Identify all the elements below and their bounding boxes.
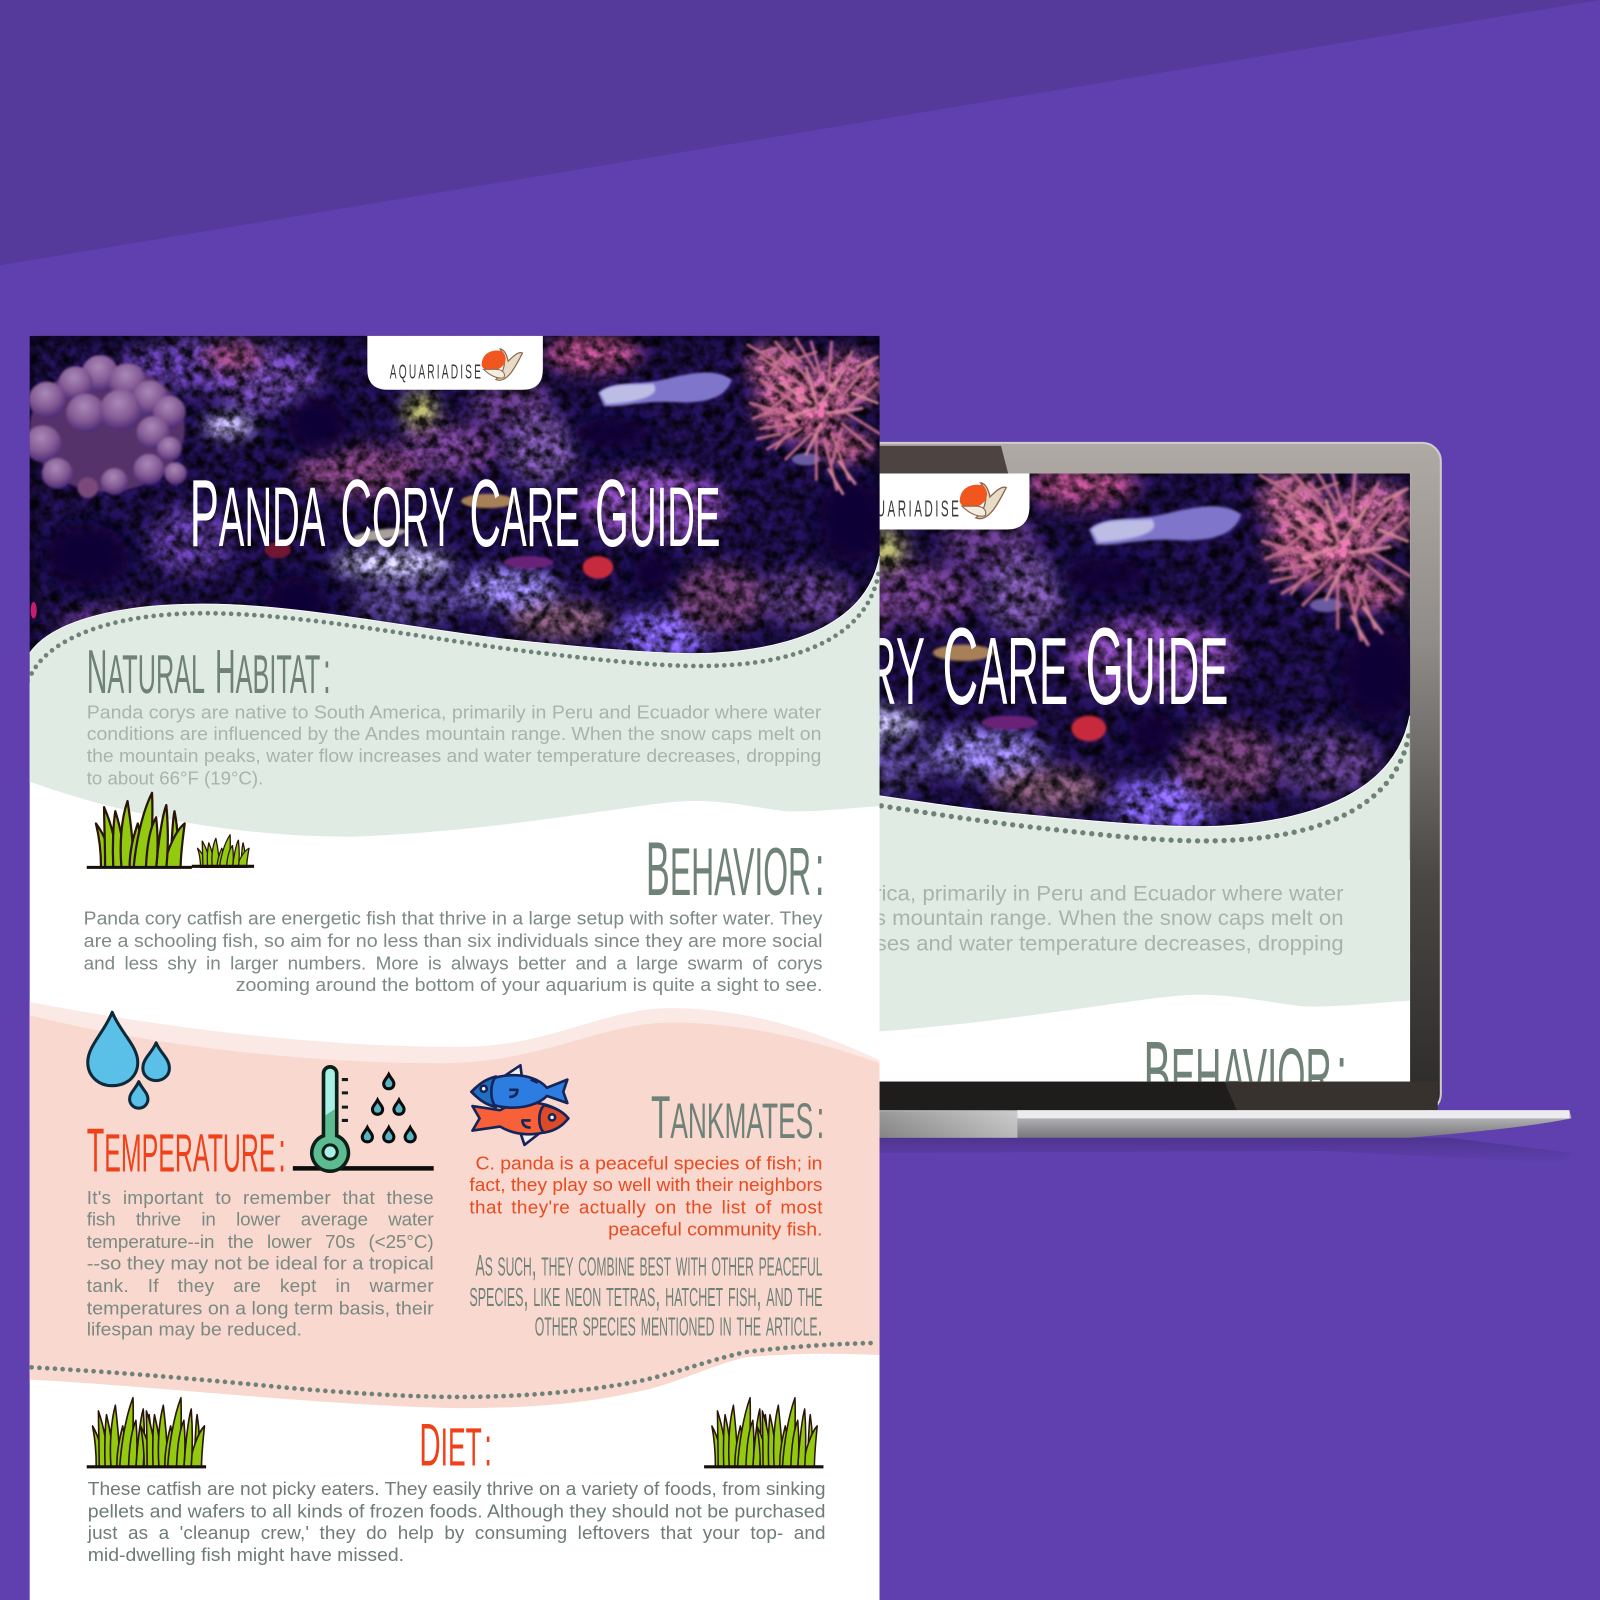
screen body text: Panda corys are native to South America, primarily in Peru and Ecuador where water xyxy=(506,882,1344,906)
text: tankmates red: C. panda is a peaceful species of fish; in xyxy=(476,1152,822,1173)
panel: pink wave xyxy=(30,1015,880,1408)
infographic card: species, like neon tetras, hatchet fish, and the xyxy=(469,1273,822,1314)
text: temperature: --so they may not be ideal for a tropical xyxy=(87,1252,434,1273)
text: temperature: fish thrive in lower average water xyxy=(87,1209,434,1230)
laptop base xyxy=(816,1110,1571,1138)
screen photo xyxy=(880,474,1410,860)
text: diet: pellets and wafers to all kinds of frozen foods. Although they should not be purchased xyxy=(88,1500,826,1521)
screen logo xyxy=(880,474,1030,530)
text: behavior: Panda cory catfish are energetic fish that thrive in a large setup with softer water. They xyxy=(84,907,823,928)
screen logo: AQUARIADISE xyxy=(855,495,961,522)
text: tankmates red: peaceful community fish. xyxy=(608,1219,822,1240)
infographic card: other species mentioned in the article. xyxy=(535,1303,822,1344)
icon: water drops xyxy=(88,1012,169,1108)
header photo xyxy=(24,336,887,683)
text: behavior: are a schooling fish, so aim for no less than six individuals since they are more social xyxy=(84,930,822,951)
laptop mockup xyxy=(880,442,1572,1156)
laptop lid xyxy=(806,443,1441,1112)
heading: temperature: Temperature: xyxy=(87,1103,286,1188)
icon: grass left xyxy=(87,1398,206,1467)
heading: diet: Diet: xyxy=(419,1397,492,1482)
screen title: Panda Cory Care Guide xyxy=(624,581,1228,734)
text: diet xyxy=(87,1478,826,1565)
text: natural habitat: to about 66°F (19°C). xyxy=(87,768,263,789)
text: diet: just as a 'cleanup crew,' they do help by consuming leftovers that your top- and xyxy=(87,1522,826,1543)
screen body text xyxy=(880,885,1344,955)
text: temperature: lifespan may be reduced. xyxy=(87,1319,302,1340)
text: tankmates note xyxy=(470,1255,822,1336)
text: natural habitat: the mountain peaks, water flow increases and water temperature decreases, dropping xyxy=(87,745,821,766)
text: tankmates red xyxy=(469,1152,823,1240)
text: diet: mid-dwelling fish might have missed. xyxy=(88,1544,404,1565)
icon: grass behavior xyxy=(87,793,254,867)
natural habitat wave panel xyxy=(30,556,880,837)
text: behavior: zooming around the bottom of your aquarium is quite a sight to see. xyxy=(236,974,822,995)
icon: thermometer xyxy=(293,1067,434,1171)
text: natural habitat xyxy=(87,701,821,789)
icon: grass right xyxy=(704,1398,823,1467)
logo tab: AQUARIADISE xyxy=(390,361,483,384)
text: natural habitat: Panda corys are native to South America, primarily in Peru and Ecuador where water xyxy=(87,701,821,722)
heading: behavior: Behavior: xyxy=(646,807,824,916)
heading: natural habitat: Natural Habitat: xyxy=(87,622,331,710)
text: temperature: temperature--in the lower 70s (<25°C) xyxy=(87,1231,434,1252)
laptop screen xyxy=(880,474,1410,1082)
text: temperature: tank. If they are kept in warmer xyxy=(87,1275,434,1296)
icon: two fish xyxy=(471,1065,568,1145)
infographic card xyxy=(24,336,887,1600)
text: natural habitat: conditions are influenced by the Andes mountain range. When the snow caps melt on xyxy=(87,723,821,744)
text: diet: These catfish are not picky eaters. They easily thrive on a variety of foods, from sinking xyxy=(88,1478,826,1499)
text: tankmates red: that they're actually on the list of most xyxy=(469,1196,823,1217)
title: Panda Cory Care Guide xyxy=(190,437,720,572)
panel: pink wave light band xyxy=(30,1002,880,1122)
text: behavior xyxy=(84,907,823,995)
background wedge xyxy=(0,0,1600,265)
heading: tankmates: Tankmates: xyxy=(651,1074,824,1154)
text: temperature xyxy=(87,1187,434,1340)
laptop reflection xyxy=(816,1138,1571,1163)
infographic card: As such, they combine best with other peaceful xyxy=(476,1243,822,1284)
logo tab xyxy=(367,336,543,390)
screen waves xyxy=(880,716,1410,1032)
screen body text: conditions are influenced by the Andes mountain range. When the snow caps melt on xyxy=(506,906,1344,930)
text: tankmates red: fact, they play so well with their neighbors xyxy=(469,1174,822,1195)
screen body text: the mountain peaks, water flow increases and water temperature decreases, dropping xyxy=(506,932,1344,956)
bottom dotted line xyxy=(32,1343,878,1397)
text: temperature: temperatures on a long term basis, their xyxy=(87,1297,434,1318)
text: behavior: and less shy in larger numbers. More is always better and a large swarm of corys xyxy=(84,952,822,973)
text: temperature: It's important to remember that these xyxy=(87,1187,434,1208)
screen behavior heading: Behavior: xyxy=(1143,1003,1347,1126)
